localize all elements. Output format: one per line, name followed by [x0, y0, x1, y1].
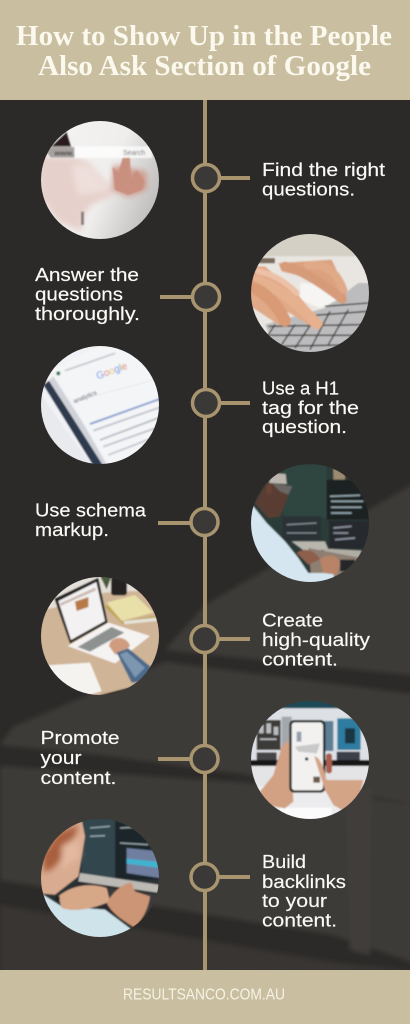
node 5 with connector: [191, 626, 250, 652]
title: How to Show Up in the People: [16, 21, 392, 52]
photo 3: phone showing Google search results: analytics: [72, 389, 98, 405]
photo 6: hands holding smartphone: [251, 701, 369, 819]
step 5 text: Create: [262, 610, 323, 630]
step 7 text: [262, 851, 346, 930]
photo 1: finger touching search bar: Search: [123, 150, 145, 157]
step 7 text: Build: [262, 851, 306, 872]
step 3 text: tag for the: [262, 397, 359, 418]
photo 3: phone showing Google search results: Google: [95, 361, 129, 382]
photo 3: phone showing Google search results: [41, 346, 159, 464]
step 2 text: Answer the: [35, 264, 139, 285]
step 5 text: content.: [262, 648, 338, 670]
node 2 with connector: [160, 284, 220, 310]
step 4 text: markup.: [35, 519, 109, 540]
step 5 text: high-quality: [262, 629, 371, 650]
node 4 with connector: [158, 508, 218, 536]
step 2 text: questions: [35, 284, 123, 304]
step 6 text: [40, 727, 120, 788]
step 4 text: Use schema: [35, 500, 147, 520]
step 1 text: Find the right: [262, 159, 385, 180]
photo 1: finger touching search bar: [41, 121, 159, 239]
title: [16, 21, 392, 82]
footer band: [0, 970, 410, 1024]
node 3 with connector: [192, 390, 250, 416]
step 6 text: Promote: [40, 727, 120, 748]
node 7 with connector: [191, 864, 250, 890]
step 6 text: content.: [40, 767, 116, 788]
step 3 text: question.: [262, 416, 347, 437]
footer website: RESULTSANCO.COM.AU: [123, 986, 285, 1004]
node 6 with connector: [158, 746, 218, 772]
photo 2: hands typing on keyboard: [251, 234, 369, 352]
step 5 text: [262, 610, 371, 670]
step 6 text: your: [40, 747, 82, 768]
step 3 text: [262, 378, 359, 437]
step 2 text: thoroughly.: [35, 303, 140, 324]
node 1 with connector: [192, 164, 250, 192]
timeline line: [203, 100, 207, 970]
step 3 text: Use a H1: [262, 378, 339, 398]
photo 1: finger touching search bar: www.: [53, 149, 74, 158]
photo 4: developer at laptops: [251, 464, 369, 582]
step 7 text: content.: [262, 910, 337, 930]
step 1 text: [262, 159, 385, 200]
step 7 text: to your: [262, 890, 327, 911]
step 1 text: questions.: [262, 178, 355, 200]
photo 5: laptop on a wooden desk: [41, 577, 159, 695]
title: Also Ask Section of Google: [38, 51, 371, 82]
photo 7: hands coding on laptop: [41, 819, 159, 937]
step 4 text: [35, 500, 147, 540]
step 2 text: [35, 264, 140, 324]
step 7 text: backlinks: [262, 871, 346, 892]
header band: [0, 0, 410, 100]
